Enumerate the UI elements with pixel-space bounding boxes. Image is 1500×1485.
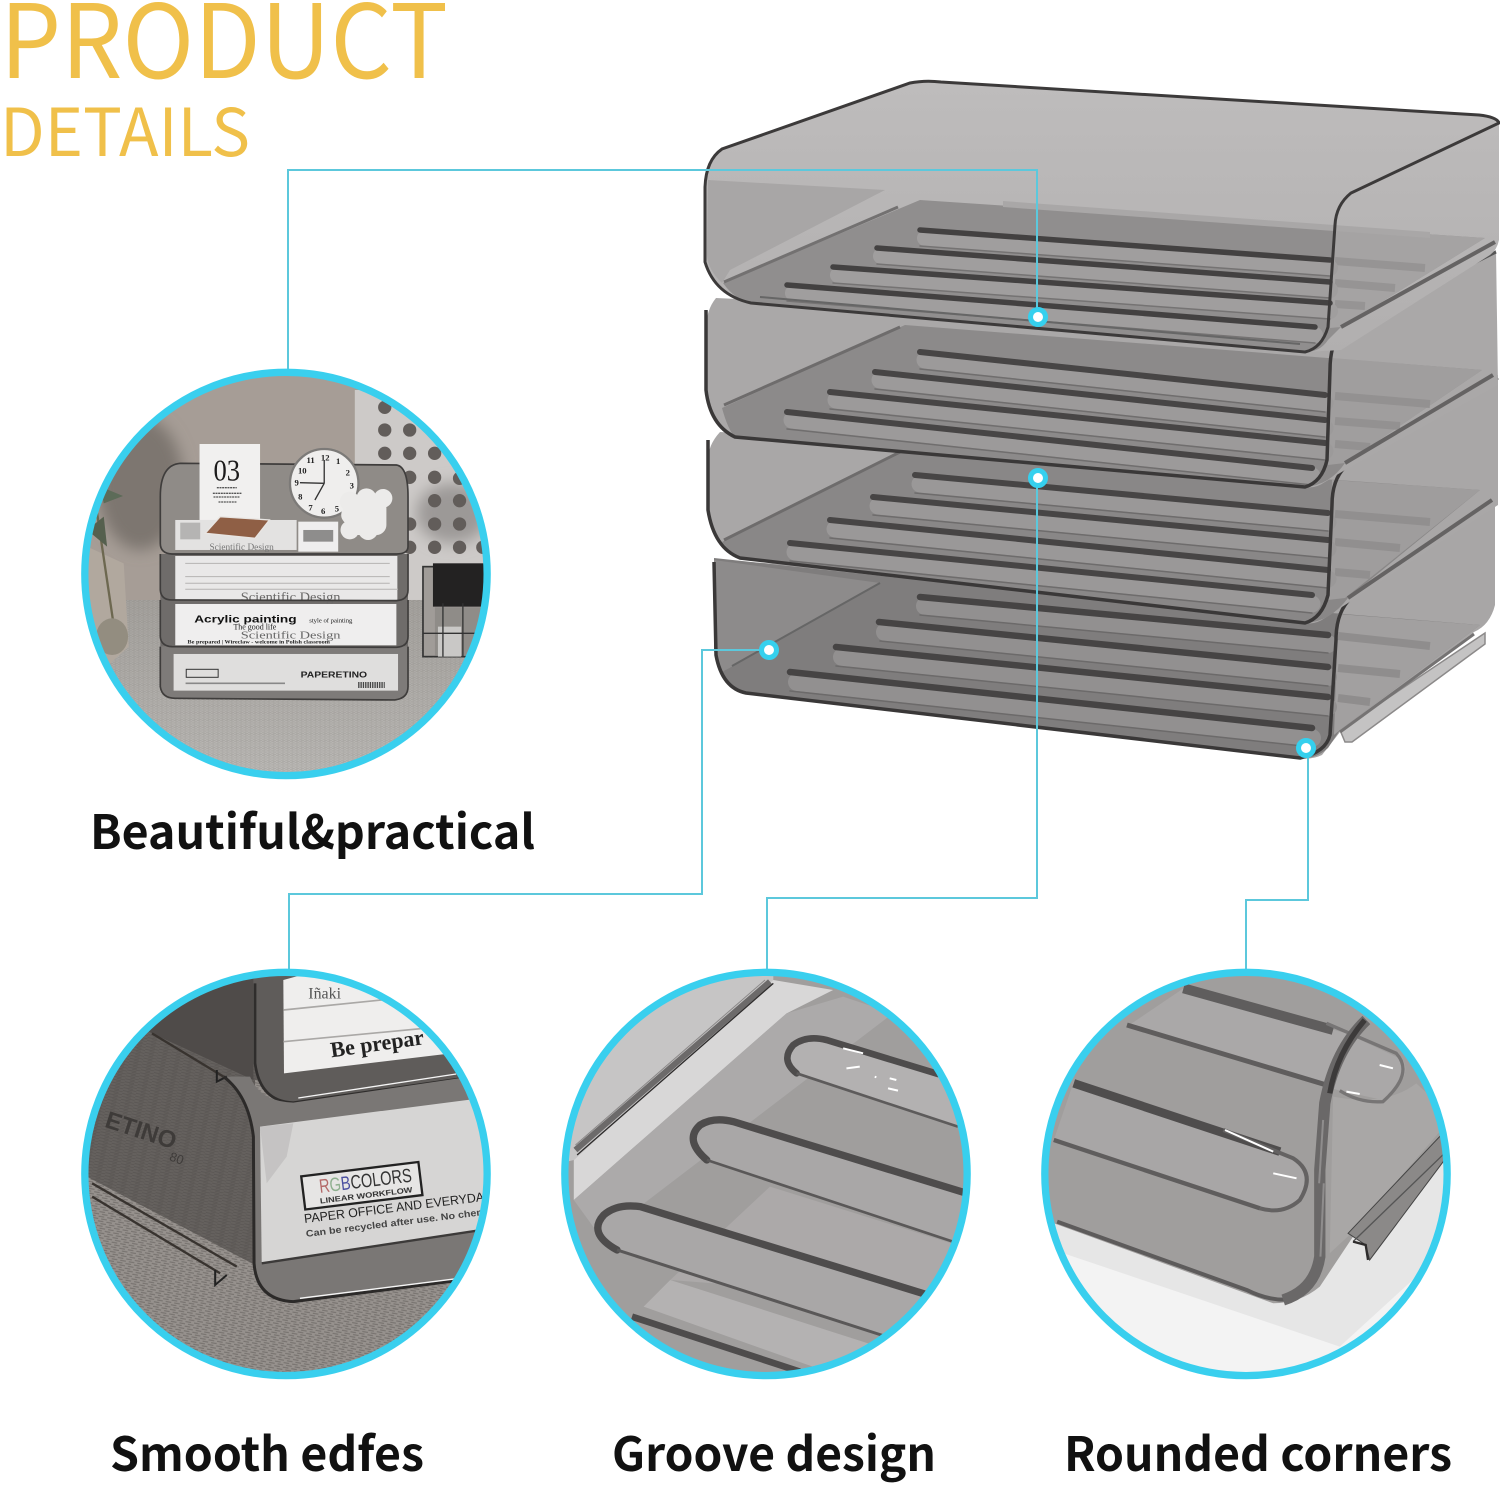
alarm clock: 3 xyxy=(350,480,355,490)
label: groove design: Groove design xyxy=(612,1416,936,1485)
circle border xyxy=(85,372,487,776)
groove 2 xyxy=(693,1119,973,1242)
front lip xyxy=(1057,1222,1297,1300)
title: DETAILS xyxy=(0,80,250,176)
box label text: Can be recycled after use. No chem xyxy=(305,1207,486,1239)
desk card 03: 03 xyxy=(213,454,240,488)
tray outlines xyxy=(160,463,408,700)
tray 3 xyxy=(708,375,1498,623)
circle photo: groove design xyxy=(560,970,973,1383)
groove top xyxy=(1127,988,1405,1102)
alarm clock: 5 xyxy=(335,503,339,513)
desk organizer xyxy=(423,563,486,657)
circle photo: smooth edges xyxy=(80,970,493,1383)
alarm clock: 9 xyxy=(294,477,299,487)
title xyxy=(0,0,448,176)
alarm clock: 7 xyxy=(308,502,313,512)
groove 1 xyxy=(786,1037,973,1127)
alarm clock: 12 xyxy=(321,453,330,463)
circle photo: smooth edges: 80 xyxy=(168,1150,186,1168)
alarm clock: 6 xyxy=(321,506,326,516)
alarm clock: 8 xyxy=(298,491,303,501)
lower tray with box xyxy=(223,1073,493,1302)
product image: stacked letter trays xyxy=(705,81,1499,759)
side rails xyxy=(92,1033,237,1273)
books xyxy=(175,520,297,550)
acrylic tray stack with books xyxy=(160,463,408,700)
alarm clock: 11 xyxy=(307,455,315,465)
box label text: PAPER OFFICE AND EVERYDA xyxy=(303,1190,485,1226)
tray 2 xyxy=(706,250,1498,487)
label: smooth edges: Smooth edfes xyxy=(110,1416,424,1485)
label: beautiful and practical: Beautiful&practical xyxy=(90,794,535,863)
plant in vase xyxy=(88,490,128,662)
desk card 03 xyxy=(200,444,260,520)
alarm clock: 1 xyxy=(336,456,340,466)
connector lines xyxy=(288,170,1308,972)
side panel xyxy=(1330,1084,1439,1252)
side rail xyxy=(575,982,770,1150)
acrylic tray stack with books: Acrylic painting xyxy=(194,614,297,625)
circle border xyxy=(1045,972,1447,1376)
alarm clock: 10 xyxy=(298,466,307,476)
upper tray with book: Be prepar xyxy=(329,1024,426,1062)
notebook xyxy=(205,517,269,538)
tray 4 (bottom) xyxy=(714,500,1495,759)
upper tray with book xyxy=(254,976,459,1103)
groove 4 xyxy=(632,1317,800,1372)
box label text xyxy=(300,1160,482,1236)
label: rounded corners: Rounded corners xyxy=(1064,1416,1452,1485)
acrylic tray stack with books: style of painting xyxy=(309,617,353,624)
groove 3 xyxy=(598,1205,928,1337)
acrylic tray stack with books: The good life xyxy=(233,622,277,631)
marker dots xyxy=(762,310,1314,756)
box label text: RGBCOLORS xyxy=(318,1166,413,1198)
foot rail xyxy=(1348,1135,1444,1260)
alarm clock xyxy=(290,449,358,518)
box label text: LINEAR WORKFLOW xyxy=(319,1185,414,1206)
acrylic tray stack with books: Scientific Design xyxy=(241,631,341,642)
acrylic tray stack with books: Scientific Design xyxy=(210,542,274,553)
upper tray with book: Iñaki xyxy=(308,985,342,1002)
acrylic tray stack with books: Scientific Design xyxy=(241,591,341,606)
groove middle xyxy=(1054,1082,1308,1210)
circle border xyxy=(565,972,967,1376)
circle border xyxy=(85,972,487,1376)
circle photo: rounded corners xyxy=(1040,970,1453,1383)
acrylic tray stack with books: PAPERETINO xyxy=(301,670,368,680)
corner post xyxy=(1283,1020,1366,1300)
circle photo: beautiful and practical xyxy=(80,370,494,787)
bubble candle xyxy=(340,488,392,540)
acrylic tray stack with books: Be prepared | Wireclaw - welcome in Polish classroom xyxy=(188,639,330,645)
alarm clock: 2 xyxy=(346,467,350,477)
circle photo: smooth edges: ETINO xyxy=(102,1107,180,1155)
tray 1 (top) xyxy=(705,81,1499,352)
